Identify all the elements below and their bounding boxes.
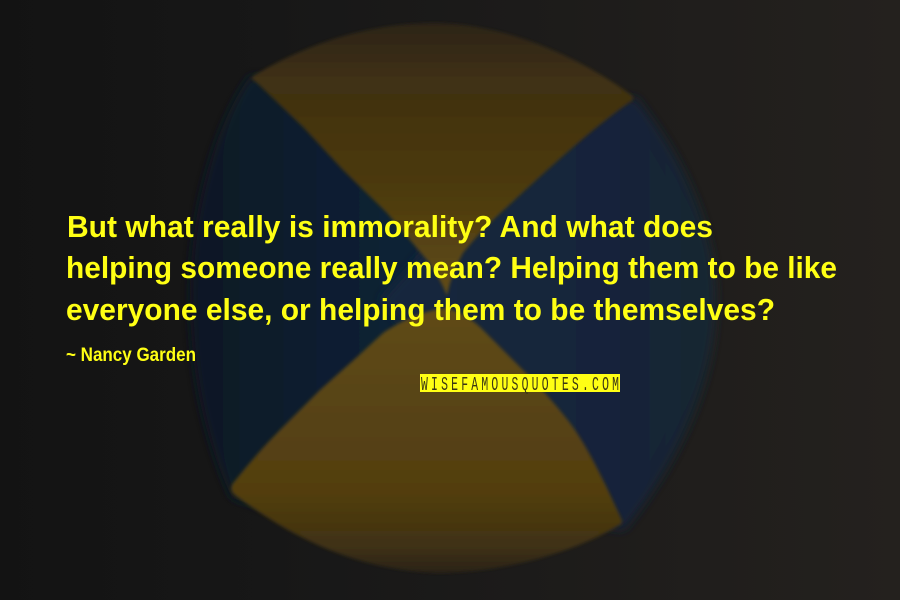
ball illustration xyxy=(190,23,716,573)
blue panel: right xyxy=(380,98,716,530)
quote line 2: helping someone really mean? Helping them to be like xyxy=(66,250,837,285)
badge text: WISEFAMOUSQUOTES.COM xyxy=(421,374,619,396)
blue panel: left xyxy=(190,76,520,520)
quote line 1: But what really is immorality? And what does xyxy=(67,209,713,244)
author attribution: ~ Nancy Garden xyxy=(66,345,196,366)
quote line 3: everyone else, or helping them to be themselves? xyxy=(66,292,775,327)
watermark badge xyxy=(420,374,620,396)
yellow panel: top xyxy=(252,23,633,296)
badge background xyxy=(420,374,620,392)
quote text xyxy=(66,209,837,327)
yellow panel: bottom xyxy=(231,308,622,573)
